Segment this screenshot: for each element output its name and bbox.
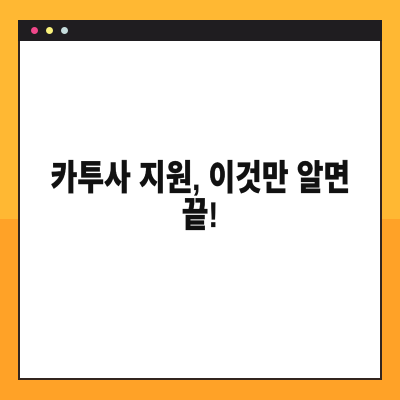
- icon: pink window dot: [31, 27, 38, 34]
- icon: grey window dot: [61, 27, 68, 34]
- title: 끝!: [182, 196, 218, 235]
- background: upper amber band: [0, 0, 400, 219]
- icon: yellow window dot: [46, 27, 53, 34]
- window title bar: [18, 20, 382, 41]
- title: [51, 159, 350, 235]
- title: 카투사 지원, 이것만 알면: [51, 159, 350, 198]
